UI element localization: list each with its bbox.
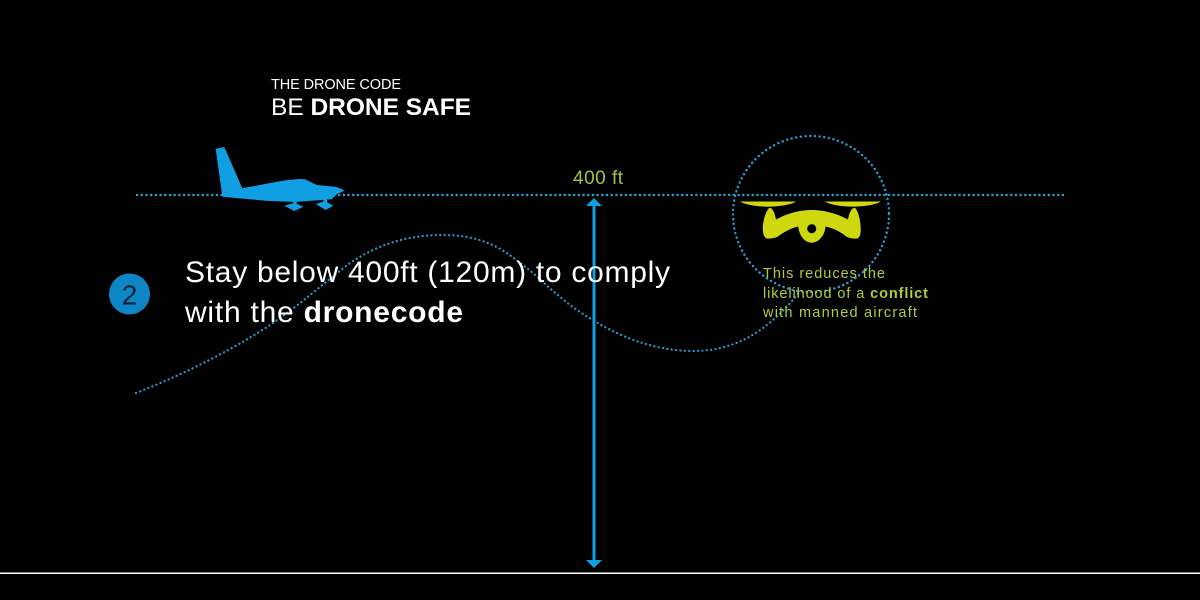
drone callout text: likelihood of a conflict xyxy=(763,286,928,302)
drone callout text: This reduces the xyxy=(763,266,885,282)
step number badge xyxy=(109,274,150,314)
title: THE DRONE CODE xyxy=(271,77,401,93)
400 ft label: 400 ft xyxy=(573,168,624,189)
dotted flight path xyxy=(136,235,800,393)
dotted drone range circle xyxy=(733,136,889,292)
drone rotors xyxy=(740,202,881,207)
drone callout text xyxy=(762,266,928,321)
main statement: Stay below 400ft (120m) to comply xyxy=(185,256,670,289)
main statement xyxy=(184,256,670,329)
drone callout text: with manned aircraft xyxy=(762,305,917,321)
main statement: with the dronecode xyxy=(184,296,463,329)
icon: drone xyxy=(740,202,881,243)
step number badge: 2 xyxy=(122,280,137,310)
title xyxy=(271,77,471,121)
title: BE DRONE SAFE xyxy=(271,94,471,121)
drone body xyxy=(763,208,861,243)
ground line xyxy=(0,572,1200,574)
height arrow xyxy=(586,198,602,568)
icon: manned aircraft xyxy=(216,147,344,211)
400 ft altitude limit line xyxy=(137,194,1065,196)
